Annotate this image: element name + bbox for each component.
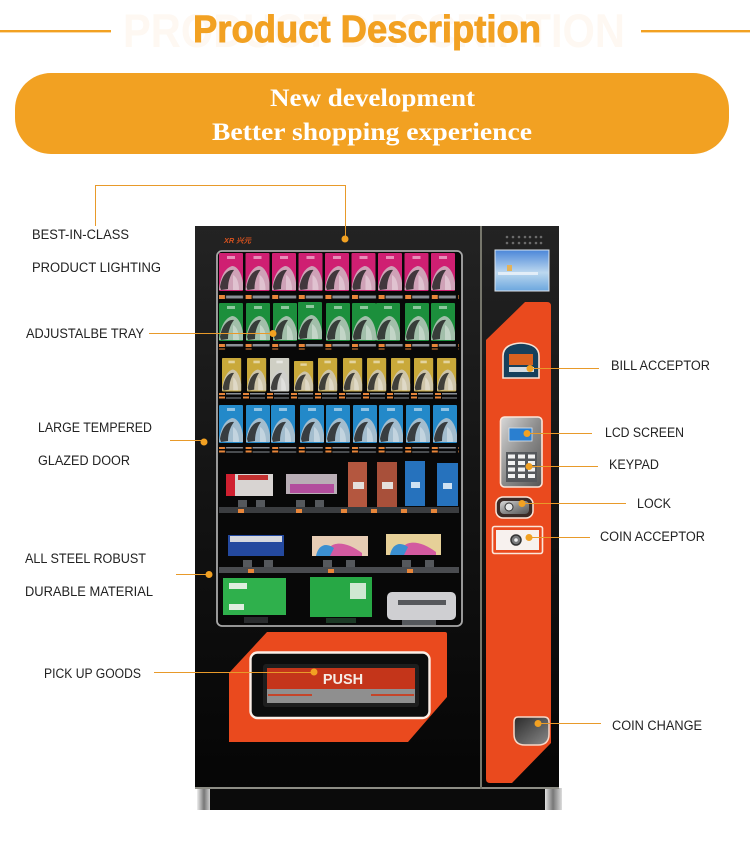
bill acceptor [503,343,539,378]
callout: door [38,420,208,468]
label: tray: ADJUSTALBE TRAY [26,326,144,341]
label: keypad: KEYPAD [609,457,659,472]
shelf row 1: pink packets [219,253,455,291]
coin change cup [514,717,549,745]
lcd screen [509,428,532,441]
label: glazed door: GLAZED DOOR [38,453,130,468]
keypad unit [500,417,542,487]
push label: PUSH [323,672,363,688]
price strip row 4 [219,447,459,452]
label: large tempered: LARGE TEMPERED [38,420,152,435]
callout: pick up goods [44,666,318,681]
touch display [495,250,549,291]
callout: lock [518,496,671,511]
title: Product Description [193,9,541,51]
callout: keypad [526,457,659,472]
lock [496,497,533,518]
label: all steel robust: ALL STEEL ROBUST [25,551,146,566]
callout: steel [25,551,212,599]
label: best-in-class: BEST-IN-CLASS [32,227,129,242]
push flap [267,668,415,703]
shelf row 7: boxes [223,577,456,625]
callout: product lighting [32,186,348,275]
callout: coin change [534,718,702,733]
label: lock: LOCK [637,496,671,511]
label: durable material: DURABLE MATERIAL [25,584,153,599]
shelf row 2: green packets [219,302,455,341]
label: bill acceptor: BILL ACCEPTOR [611,358,710,373]
display window [217,251,462,626]
pickup door panel [229,632,447,742]
label: product lighting: PRODUCT LIGHTING [32,260,161,275]
header rule right [641,30,750,32]
keypad [506,452,537,482]
label: coin acceptor: COIN ACCEPTOR [600,529,705,544]
pickup door [250,652,430,718]
label: coin change: COIN CHANGE [612,718,702,733]
label: pick up goods: PICK UP GOODS [44,666,141,681]
speaker grille [506,236,542,244]
shelf row 5: boxes [219,461,459,513]
vending machine [195,226,562,810]
machine legs [197,788,562,810]
callout: coin acceptor [526,529,705,544]
price strip row 2 [219,344,459,350]
shelf row 4: blue packets [219,405,457,443]
machine cabinet [195,226,559,789]
shelf row 6: boxes [219,534,459,573]
control panel [486,302,551,783]
banner line 2: Better shopping experience [212,119,532,146]
callout: tray [26,326,276,341]
price strip row 3 [219,393,459,398]
header rule left [0,30,111,32]
brand logo: XR 兴元 [223,237,252,245]
ghost heading: PRODUCT DESCRIPTION [123,4,625,57]
callout: bill acceptor [526,358,710,373]
banner [15,73,729,154]
shelf row 3: yellow packets [222,358,456,391]
coin acceptor [492,526,542,554]
label: lcd screen: LCD SCREEN [605,425,684,440]
banner line 1: New development [270,85,476,112]
callout: lcd screen [524,425,684,440]
price strip row 1 [219,295,459,300]
